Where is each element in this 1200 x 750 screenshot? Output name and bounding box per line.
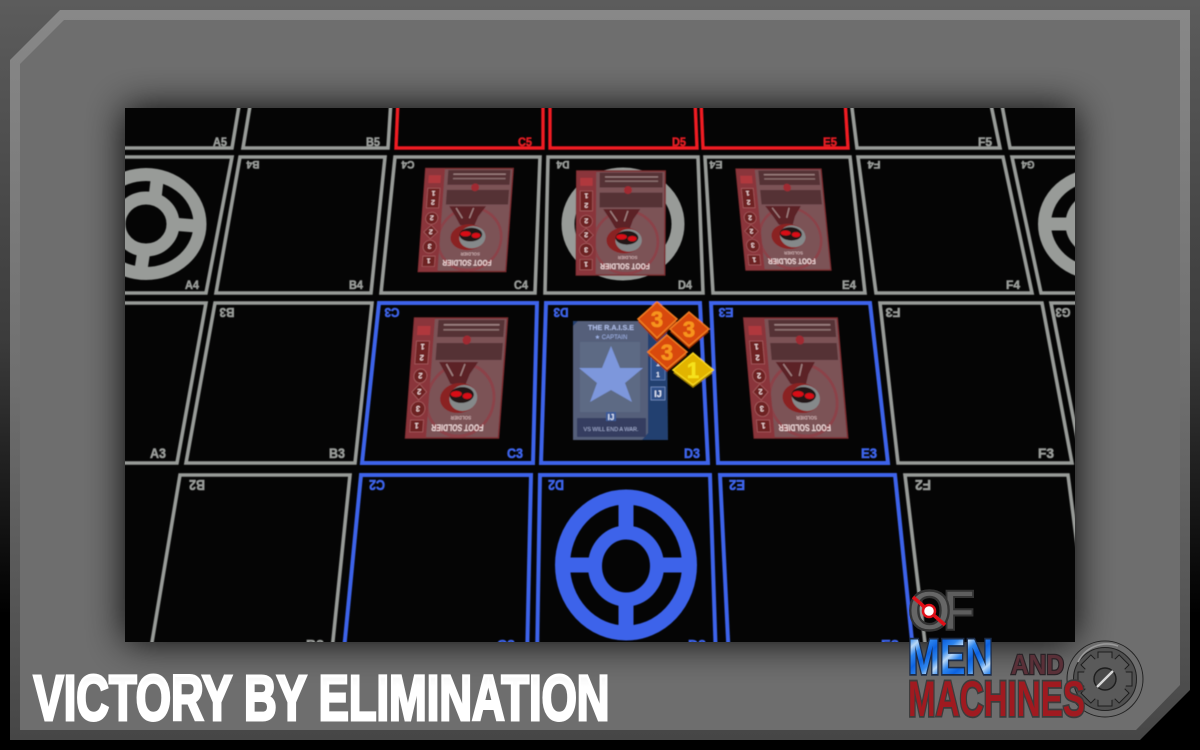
card: foot soldier C3: 2 [419, 353, 424, 362]
card: foot soldier E3: 2 [757, 371, 762, 380]
row 2 cells [149, 475, 1092, 660]
row 4 cells: G4 [1021, 158, 1034, 170]
logo: OF [908, 579, 975, 643]
card: foot soldier E4 [736, 169, 831, 270]
card: foot soldier E4: 1 [745, 189, 750, 196]
card: foot soldier C4 [418, 168, 513, 272]
logo: gear [1067, 641, 1143, 717]
row 4 cells: E4 [709, 158, 722, 170]
stat badge: IJ [654, 389, 662, 399]
logo: Of Men and Machines [908, 579, 1143, 727]
card: foot soldier C3: 3 [415, 404, 420, 413]
card subtitle: ★ CAPTAIN [595, 334, 627, 341]
row 3 cells: B3 [220, 305, 234, 320]
row 5 cells: B5 [366, 135, 380, 149]
row 2 cells: E2 [729, 476, 745, 493]
row 5 cells: F5 [978, 135, 992, 149]
card: foot soldier E3: 2 [755, 353, 760, 362]
card: foot soldier C4: 1 [431, 189, 436, 196]
row 5 cells: E5 [823, 135, 837, 149]
card: foot soldier D4 [576, 171, 665, 275]
row 2 cells: B2 [306, 637, 324, 654]
logo: OF: F [943, 579, 975, 643]
target: D2 blue home base [562, 495, 690, 635]
board drop shadow [125, 108, 1075, 642]
row 5 cells: D5 [672, 135, 686, 149]
card: foot soldier C3: FOOT SOLDIER [431, 422, 484, 433]
card: foot soldier E4: FOOT SOLDIER [767, 257, 816, 266]
token: yellow 1: 1 [687, 358, 699, 383]
ability text: VS WILL END A WAR. [584, 427, 639, 433]
stat badge [651, 357, 665, 380]
row 2 cells: B2 [189, 476, 205, 493]
game board [125, 108, 1075, 642]
card: foot soldier E4: SOLDIER [784, 251, 803, 255]
card: foot soldier D4: 2 [584, 217, 588, 224]
card: foot soldier C3: 2 [418, 371, 423, 380]
card: foot soldier D4: 3 [584, 245, 588, 252]
card: foot soldier E3: 1 [760, 421, 766, 430]
card: foot soldier E3: 3 [759, 404, 764, 413]
row 3 cells: D3 [684, 445, 700, 461]
card: foot soldier E3: FOOT SOLDIER [778, 422, 831, 433]
title: VICTORY BY ELIMINATION [34, 662, 610, 734]
card: foot soldier C4: FOOT SOLDIER [442, 258, 492, 267]
card: foot soldier C3: SOLDIER [450, 414, 472, 420]
card: foot soldier E4: 2 [749, 227, 754, 234]
row 3 cells: C3 [384, 305, 400, 320]
card: foot soldier D4: 2 [584, 231, 588, 238]
card: foot soldier E3: 2 [758, 387, 763, 396]
row 4 cells: A4 [185, 278, 199, 292]
token: orange 3: 3 [683, 317, 695, 342]
token: orange 3 [648, 335, 687, 372]
target: A4 grey [125, 167, 208, 281]
logo: AND: AND [1011, 649, 1064, 680]
row 4 cells: B4 [349, 278, 363, 292]
row 4 cells: F4 [1006, 278, 1020, 292]
row 3 cells: D3 [554, 305, 568, 320]
row 4 cells: E4 [842, 278, 856, 292]
card ability box [577, 418, 646, 437]
row 2 cells: E2 [881, 637, 899, 654]
row 3 cells [100, 303, 1120, 463]
row 5 cells [125, 108, 1075, 151]
row 4 cells: D4 [678, 278, 692, 292]
card: foot soldier E4: 2 [748, 213, 752, 220]
card: foot soldier C3: 2 [417, 387, 422, 396]
row 3 cells: C3 [507, 445, 523, 461]
card: foot soldier E4: 3 [750, 241, 755, 248]
row 2 cells: D2 [548, 476, 564, 493]
row 4 cells: D4 [556, 158, 570, 170]
card: foot soldier C3: 1 [419, 342, 425, 351]
logo: MACHINES: MACHINES [908, 671, 1085, 727]
stat badge: 1 [656, 372, 660, 379]
token: orange 3: 3 [651, 307, 663, 332]
token: orange 3: 3 [661, 340, 673, 365]
card badge: IJ [608, 413, 614, 422]
card: foot soldier E3 [744, 318, 848, 438]
card: foot soldier D4: 1 [584, 260, 588, 267]
row 2 cells: D2 [688, 637, 706, 654]
card: The R.A.I.S.E captain D3 [573, 321, 668, 440]
row 4 cells: B4 [246, 158, 260, 170]
row 3 cells: B3 [329, 445, 345, 461]
row 3 cells: F3 [886, 305, 900, 320]
target: G4 grey [1037, 172, 1075, 276]
row 4 cells: C4 [401, 158, 414, 170]
target: D4 grey [568, 174, 678, 274]
card: foot soldier D4: 2 [584, 201, 588, 208]
row 3 cells: E3 [861, 445, 877, 461]
card: foot soldier C4: SOLDIER [460, 252, 480, 257]
card: foot soldier C4: 2 [431, 198, 435, 205]
big star [579, 346, 643, 402]
logo: OF: O [908, 579, 951, 643]
row 3 cells: E3 [718, 305, 734, 320]
row 4 cells [100, 157, 1120, 293]
card title: THE R.A.I.S.E [588, 323, 634, 332]
row 2 cells: C2 [369, 476, 385, 493]
token: yellow 1 [673, 353, 713, 388]
card: foot soldier D4: SOLDIER [617, 255, 638, 260]
card: foot soldier C3 [406, 318, 508, 438]
card: foot soldier E3: SOLDIER [796, 414, 817, 420]
stat badge: 1 [656, 361, 660, 368]
row 4 cells: C4 [514, 278, 528, 292]
card: foot soldier D4: FOOT SOLDIER [600, 261, 650, 271]
row 3 cells: G3 [1056, 305, 1070, 320]
card: foot soldier C4: 3 [427, 242, 432, 249]
token: orange 3 [638, 302, 677, 342]
card: foot soldier E4: 2 [746, 198, 751, 205]
row 5 cells: C5 [518, 135, 532, 149]
card: foot soldier C3: 1 [414, 421, 419, 430]
logo: MEN: MEN [908, 629, 993, 685]
row 4 cells: F4 [867, 158, 880, 170]
row 3 cells: F3 [1038, 445, 1054, 461]
token: orange 3 [670, 312, 709, 349]
card: foot soldier E3: 1 [753, 342, 759, 351]
card: foot soldier C4: 2 [428, 227, 433, 234]
row 2 cells: F2 [915, 476, 931, 493]
card: foot soldier E4: 1 [752, 255, 756, 262]
row 5 cells: A5 [213, 135, 227, 149]
row 2 cells: C2 [497, 637, 515, 654]
card: foot soldier D4: 1 [584, 192, 588, 198]
row 3 cells: A3 [150, 445, 166, 461]
card: foot soldier C4: 2 [429, 214, 434, 221]
card: foot soldier C4: 1 [426, 257, 431, 264]
